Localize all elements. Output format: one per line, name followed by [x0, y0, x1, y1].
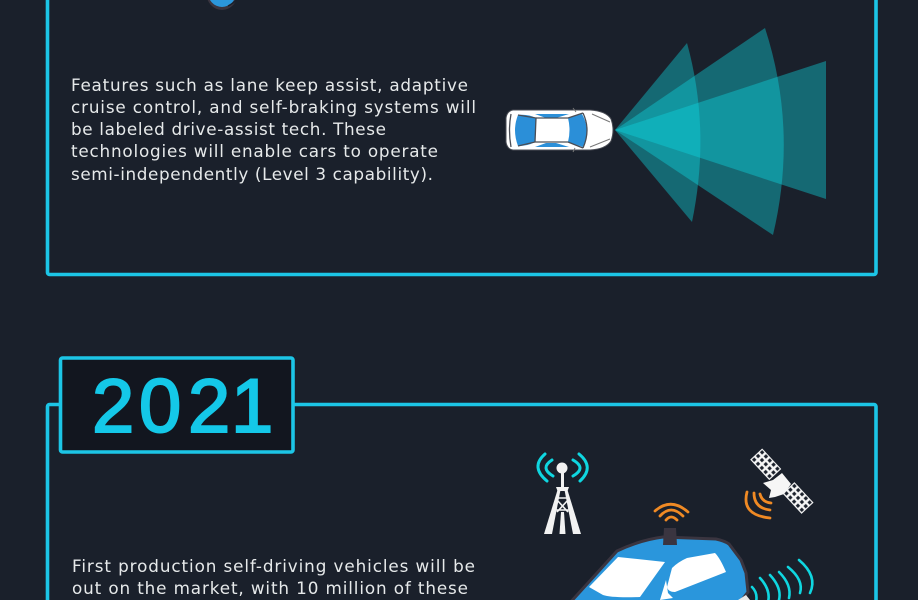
icon: car top view — [506, 108, 613, 152]
car headlight — [738, 595, 750, 600]
text: 2021 description — [72, 556, 475, 598]
text: drive-assist description: semi-independently (Level 3 capability). — [71, 164, 433, 184]
icon: satellite — [746, 448, 814, 518]
car windows — [589, 553, 726, 600]
text: drive-assist description: Features such as lane keep assist, adaptive — [71, 75, 468, 95]
text: 2021 description: out on the market, with 10 million of these — [72, 578, 468, 598]
text: 2021 description: First production self-driving vehicles will be — [72, 556, 475, 576]
text: drive-assist description — [71, 75, 476, 184]
car body — [568, 537, 748, 600]
chart: sensor cones — [615, 28, 826, 235]
icon: front sensor arcs — [752, 560, 812, 600]
heading: year 2021: 2021 — [92, 364, 273, 449]
icon: roof antenna — [663, 528, 677, 545]
text: drive-assist description: technologies will enable cars to operate — [71, 141, 438, 161]
text: drive-assist description: cruise control, and self-braking systems will — [71, 97, 476, 117]
panel: 2021 frame — [48, 404, 876, 600]
icon: cropped blue emblem — [206, 0, 238, 10]
panel: drive-assist frame — [48, 0, 876, 274]
icon: self-driving car — [568, 504, 812, 600]
text: drive-assist description: be labeled drive-assist tech. These — [71, 119, 386, 139]
icon: roof signal arcs — [655, 504, 688, 520]
icon: radio tower — [538, 454, 587, 534]
